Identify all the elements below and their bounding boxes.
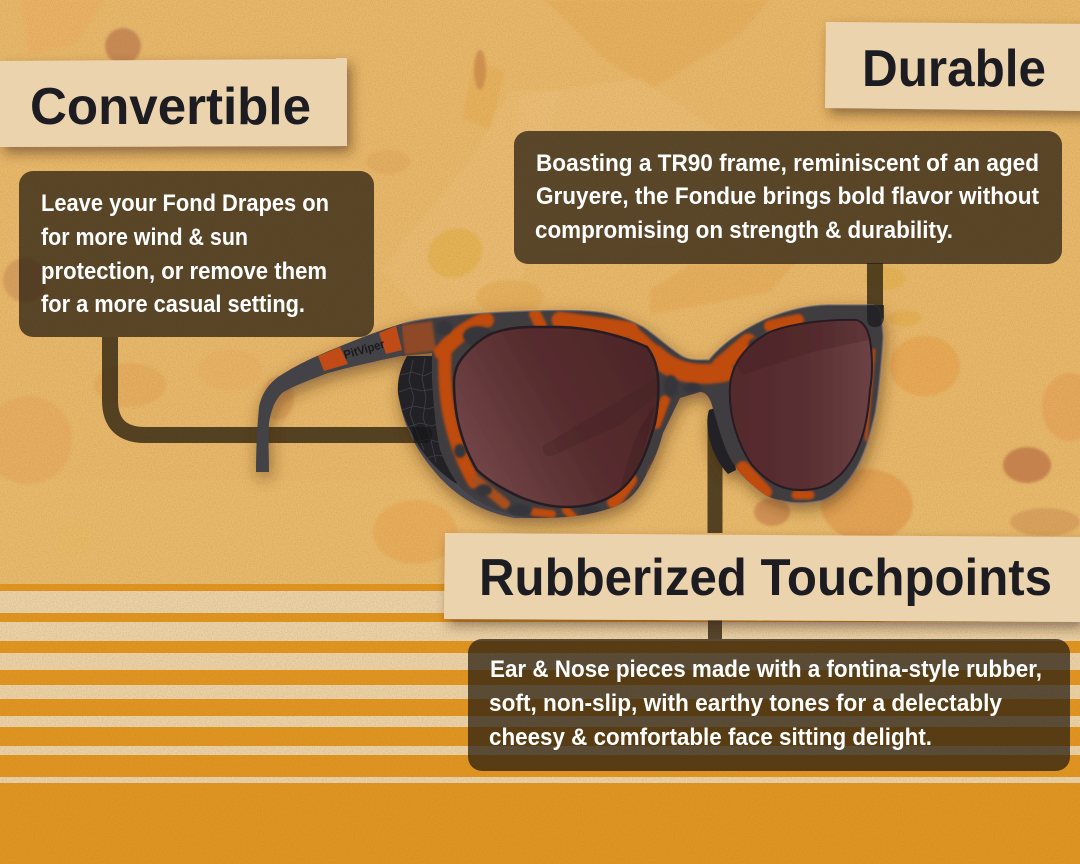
heading: Convertible: Convertible (30, 78, 311, 136)
rubber skirt below frame (398, 380, 540, 518)
panel: Durable description: compromising on strength & durability. (535, 217, 953, 244)
panel: Convertible description: Leave your Fond Drapes on (41, 190, 329, 217)
sunglasses (256, 300, 890, 525)
panel: Rubberized Touchpoints description: cheesy & comfortable face sitting delight. (489, 724, 932, 751)
frame bevel edge (402, 305, 883, 503)
panel: Rubberized Touchpoints description (468, 639, 1070, 771)
right lens upper shadow band (735, 320, 869, 375)
right rubber nose piece (707, 405, 736, 474)
side shield mesh (398, 356, 457, 484)
panel: Rubberized Touchpoints description: Ear & Nose pieces made with a fontina-style rubber, (490, 656, 1042, 683)
brand text on temple: PitViper (342, 337, 386, 362)
heading: Rubberized Touchpoints: Rubberized Touchpoints (479, 549, 1052, 607)
panel: Durable description: Gruyere, the Fondue brings bold flavor without (536, 183, 1039, 210)
left lens dark crescent (620, 405, 655, 490)
heading panel: Convertible (0, 58, 347, 147)
connector overlay on sunglasses (412, 305, 884, 443)
heading: Durable: Durable (862, 40, 1046, 98)
frame front (395, 300, 890, 525)
tortoise patches (403, 314, 874, 518)
heading panel: Rubberized Touchpoints (444, 533, 1080, 622)
left lens temple reflection (543, 377, 658, 456)
dark tortoise blots (436, 321, 762, 516)
panel: Convertible description: for a more casual setting. (41, 291, 305, 318)
panel: Rubberized Touchpoints description: soft, non-slip, with earthy tones for a delectably (489, 690, 1003, 717)
heading panel: Durable (825, 22, 1080, 111)
connector lines behind sunglasses (110, 263, 875, 639)
panel: Convertible description: for more wind & sun (41, 224, 248, 251)
panel: Convertible description: protection, or remove them (41, 258, 327, 285)
panel: Durable description (514, 131, 1062, 264)
striped lower band (0, 584, 1080, 864)
cheese wedge shapes (0, 0, 1080, 564)
panel: Convertible description (19, 171, 374, 337)
temple arm (256, 322, 414, 472)
right lens (730, 320, 872, 490)
panel: Durable description: Boasting a TR90 frame, reminiscent of an aged (536, 150, 1039, 177)
left lens (454, 327, 658, 507)
